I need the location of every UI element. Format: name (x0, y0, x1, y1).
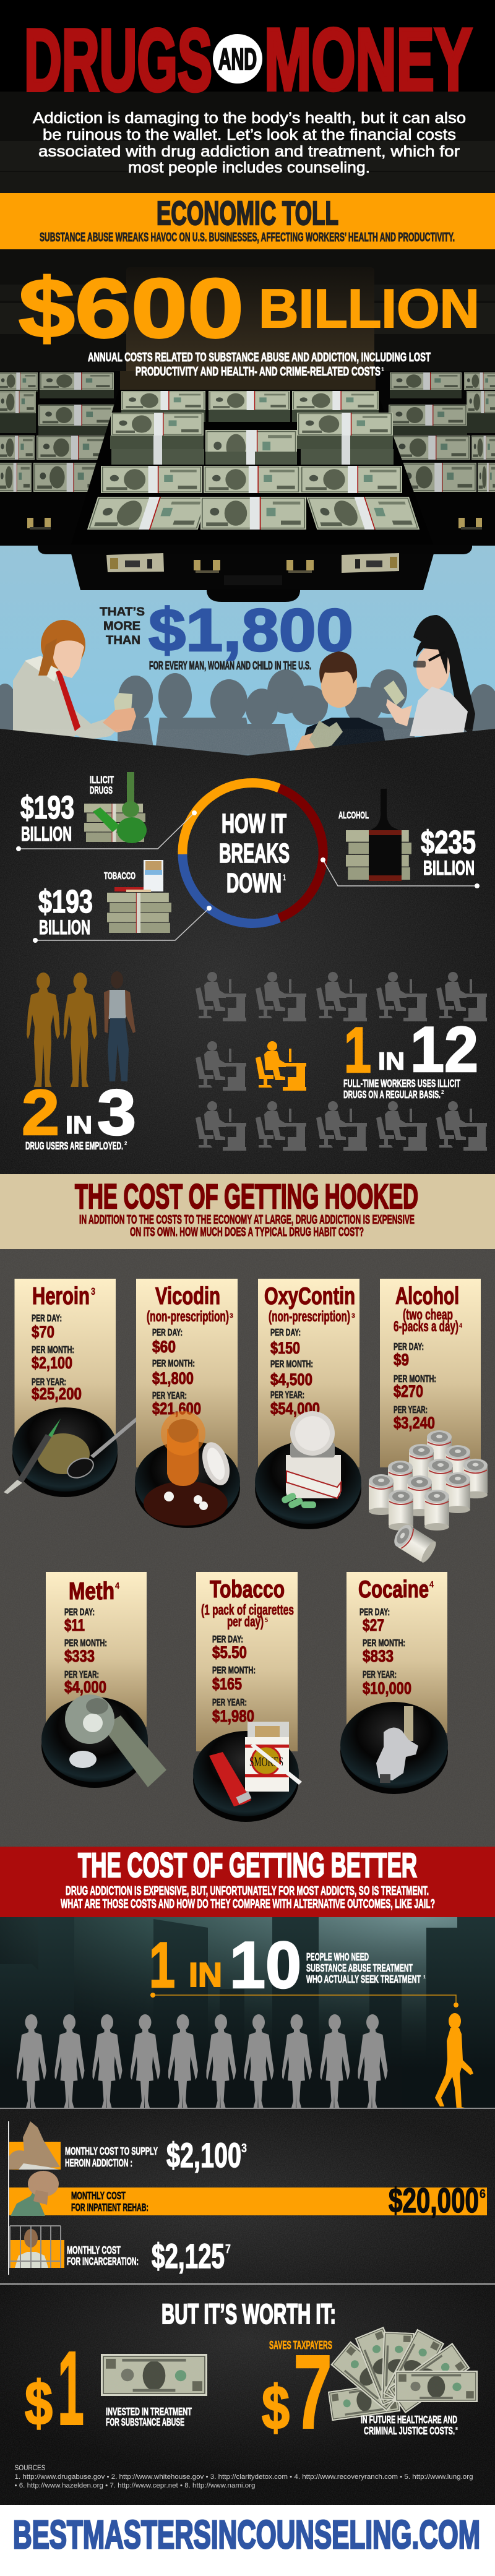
illustration: cocaine plate (340, 1702, 448, 1794)
card: heroin: $2,100 (32, 1354, 72, 1372)
card: vicodin: $21,600 (152, 1399, 201, 1418)
panel: money stacks and briefcase (0, 371, 495, 602)
bar: incarceration (9, 2226, 231, 2275)
intro text: most people includes counseling. (128, 159, 370, 176)
subheading (61, 1884, 435, 1911)
icon: fan of dollar bills (328, 2327, 478, 2421)
panel: sky background (0, 545, 495, 758)
icon: money stack (84, 804, 145, 842)
panel: city skyline (0, 1917, 495, 2109)
card: tobacco: $1,980 (212, 1707, 254, 1725)
illustration: meth pipe plate (41, 1694, 166, 1788)
stat: 1 in 10 seek treatment: SUBSTANCE ABUSE TREATMENT (306, 1962, 413, 1974)
icon: arm with syringe (9, 2121, 60, 2170)
card: alcohol: 4 (459, 1323, 462, 1329)
card: heroin: PER MONTH: (32, 1345, 74, 1355)
sources: • 6. http://www.hazelden.org • 7. http://www.cepr.net • 8. http://www.nami.org (15, 2482, 255, 2489)
stat: 1 in 12 workers: 1 (344, 1015, 371, 1086)
icon: man behind bars (10, 2226, 61, 2268)
heading: economic toll: ECONOMIC TOLL (157, 195, 338, 232)
bar: inpatient rehab: MONTHLY COST (71, 2189, 126, 2202)
badge: AND: AND (218, 43, 257, 76)
chart: desk worker pictogram (196, 972, 487, 1151)
stat: 2 in 3 employed: 3 (97, 1077, 136, 1149)
stat: $1 invested: $ (25, 2369, 53, 2438)
panel: monthly cost comparison (0, 2109, 495, 2284)
stat: 1 in 10 seek treatment: 1 (423, 1975, 426, 1980)
bar: inpatient rehab: 6 (480, 2187, 486, 2201)
stat: illicit drugs: BILLION (21, 823, 72, 845)
card: meth: Meth (69, 1578, 114, 1605)
card: vicodin: PER YEAR: (152, 1391, 187, 1401)
heading: how it breaks down (219, 809, 290, 898)
icon: money stack (346, 830, 411, 880)
card: meth: $4,000 (64, 1678, 106, 1696)
stat: 1 in 12 workers: 12 (410, 1014, 478, 1086)
card: tobacco: PER DAY: (212, 1634, 243, 1645)
clasps (194, 560, 314, 573)
card: tobacco: $5.50 (212, 1643, 247, 1662)
callout lines (19, 813, 477, 940)
intro text: be ruinous to the wallet. Let’s look at the financial costs (43, 126, 456, 144)
lid lining (120, 371, 376, 391)
stat: 1 in 12 workers: IN (378, 1048, 405, 1075)
card: meth: $333 (64, 1647, 95, 1665)
stat: 2 in 3 employed: IN (66, 1112, 92, 1139)
card: oxycontin: $150 (270, 1339, 300, 1357)
back money stacks (0, 372, 495, 492)
card: vicodin: (non-prescription) (147, 1308, 229, 1325)
heading: how it breaks down: BREAKS (219, 838, 290, 869)
card: heroin: Heroin (32, 1283, 90, 1310)
card: tobacco: per day) (227, 1613, 264, 1629)
stat: $7 saved: $ (262, 2373, 290, 2442)
card: oxycontin: $54,000 (270, 1399, 320, 1418)
card: meth: PER MONTH: (64, 1638, 107, 1649)
illustration: woman with glasses counting money (384, 615, 475, 736)
bar: incarceration: 7 (225, 2243, 231, 2256)
card: tobacco: PER YEAR: (212, 1698, 247, 1708)
bar: heroin supply: 3 (241, 2142, 247, 2155)
card: oxycontin: PER YEAR: (270, 1390, 304, 1401)
icon: cigarette pack and lighter (114, 860, 163, 892)
badge: AND (213, 34, 262, 84)
stat: tobacco: BILLION (39, 916, 90, 938)
card: oxycontin: (non-prescription) (269, 1308, 350, 1325)
stat: tobacco: TOBACCO (104, 871, 136, 882)
caption: for every man, woman and child: FOR EVERY MAN, WOMAN AND CHILD IN THE U.S. (149, 659, 311, 672)
intro text: Addiction is damaging to the body’s health, but it can also (33, 109, 466, 127)
card: heroin: $70 (32, 1323, 54, 1341)
panel: footer band (0, 2505, 495, 2576)
sources: 1. http://www.drugabuse.gov • 2. http://www.whitehouse.gov • 3. http://claritydetox.com • 4. http://www.recoveryranch.com • 5. http://www.lung.org (15, 2473, 473, 2481)
stat: 2 in 3 employed (22, 971, 136, 1152)
stat: alcohol (338, 789, 476, 881)
heading: how it breaks down: DOWN (226, 868, 282, 898)
card: cocaine: PER MONTH: (363, 1638, 405, 1649)
money in hand (103, 693, 136, 732)
stat: 1 in 10 seek treatment: PEOPLE WHO NEED (306, 1951, 369, 1963)
card: vicodin: 3 (230, 1313, 233, 1320)
card: heroin: $25,200 (32, 1385, 82, 1403)
big figure: $600 billion: BILLION (259, 278, 480, 339)
heading: but it's worth it: BUT IT’S WORTH IT: (161, 2298, 336, 2330)
card: tobacco: (1 pack of cigarettes (201, 1602, 294, 1618)
big figure: $600 billion: $600 (19, 261, 244, 355)
icon: whiskey bottle (369, 789, 402, 881)
card: cocaine: PER DAY: (359, 1607, 390, 1618)
bar: heroin supply: HEROIN ADDICTION : (65, 2157, 132, 2169)
stat: illicit drugs: ILLICIT (90, 774, 114, 786)
black case edge with side clasps (0, 492, 495, 554)
stat: $1 invested: INVESTED IN TREATMENT (106, 2405, 192, 2418)
card: alcohol: PER MONTH: (394, 1374, 436, 1385)
case lower body (71, 553, 434, 602)
card: meth: PER DAY: (64, 1607, 95, 1618)
stat: tobacco: $193 (38, 884, 93, 920)
bar: heroin supply (9, 2121, 247, 2175)
title: Drugs and Money: DRUGS (24, 11, 212, 109)
card: heroin (4, 1279, 143, 1497)
money (309, 721, 343, 750)
card: alcohol: PER YEAR: (394, 1405, 428, 1415)
card: tobacco: 5 (265, 1617, 268, 1624)
stat: 1 in 10 seek treatment: 1 (149, 1930, 175, 2001)
intro text: associated with drug addiction and treatment, which for (38, 143, 460, 160)
card: alcohol: $270 (394, 1382, 423, 1401)
icon: one dollar bill (101, 2354, 207, 2396)
card: heroin: 3 (91, 1286, 95, 1297)
bar: inpatient rehab: FOR INPATIENT REHAB: (71, 2201, 148, 2213)
combination locks (106, 553, 399, 573)
card: oxycontin: PER MONTH: (270, 1359, 313, 1370)
subheading (79, 1213, 415, 1239)
illustration: cigarettes and lighter plate (193, 1722, 302, 1822)
card: tobacco: PER MONTH: (212, 1665, 256, 1676)
icon: bald man (11, 2171, 59, 2216)
stat: tobacco (38, 860, 171, 938)
illustration: man counting money (13, 620, 136, 741)
card: vicodin: PER MONTH: (152, 1359, 195, 1369)
stat: $7 saved: SAVES TAXPAYERS (269, 2339, 332, 2351)
connector: one in ten line (150, 1993, 458, 2007)
text: that's more than: THAN (106, 634, 140, 647)
panel: grey cloth background (0, 1249, 495, 1847)
panel: worth it section (0, 2283, 495, 2505)
stat: 2 in 3 employed: 2 (124, 1141, 127, 1146)
illustration: crowd silhouettes (0, 669, 495, 755)
heading: how it breaks down: 1 (283, 872, 286, 882)
card: vicodin: $60 (152, 1337, 176, 1356)
illustration: boy counting money (291, 651, 389, 758)
description: annual costs (88, 351, 431, 379)
card: oxycontin: OxyContin (264, 1283, 355, 1310)
stat: $1 invested: FOR SUBSTANCE ABUSE (106, 2416, 184, 2428)
stat: 1 in 10 seek treatment: IN (189, 1956, 222, 1994)
stat: $7 saved (262, 2327, 478, 2451)
illustration: heroin plate (4, 1407, 143, 1497)
money (384, 680, 405, 705)
panel: cost of getting better banner (0, 1845, 495, 1917)
illustration: cigarettes and lighter plate: SMOKES (249, 1754, 283, 1769)
front money stacks (87, 391, 420, 530)
card: cocaine: $833 (363, 1647, 394, 1665)
stat: 1 in 10 seek treatment (149, 1928, 426, 2002)
card: alcohol: $3,240 (394, 1414, 435, 1432)
case interior (71, 390, 433, 544)
chart: how it breaks down ring (183, 783, 323, 924)
card: alcohol: PER DAY: (394, 1342, 424, 1352)
card: meth: $11 (64, 1616, 85, 1634)
text: that's more than: THAT’S (100, 606, 145, 619)
panel: header background (0, 0, 495, 371)
card: alcohol: 6-packs a day) (394, 1318, 458, 1335)
bar: inpatient rehab (9, 2171, 487, 2220)
card: vicodin: PER DAY: (152, 1328, 183, 1338)
description: annual costs: 1 (381, 366, 384, 372)
card: tobacco: Tobacco (210, 1576, 285, 1603)
bar: incarceration: MONTHLY COST (67, 2244, 121, 2256)
stat: alcohol: ALCOHOL (338, 810, 369, 821)
illustration: vicodin plate (135, 1411, 240, 1528)
card: cocaine (340, 1572, 448, 1794)
card: oxycontin: PER DAY: (270, 1328, 301, 1338)
card: heroin: PER YEAR: (32, 1377, 66, 1388)
bar: heroin supply: MONTHLY COST TO SUPPLY (65, 2145, 158, 2157)
text: that's more than (100, 606, 145, 647)
icon: person with tank top (104, 971, 136, 1081)
card: alcohol: $9 (394, 1350, 409, 1369)
panel: cost of getting hooked header (0, 1174, 495, 1249)
intro text (33, 109, 466, 176)
card: vicodin (135, 1279, 240, 1528)
sources (15, 2463, 473, 2489)
big figure: $600 billion (19, 261, 480, 355)
card: vicodin: $1,800 (152, 1369, 194, 1388)
card: meth: PER YEAR: (64, 1670, 99, 1680)
card: oxycontin: 3 (351, 1313, 355, 1320)
card: cocaine: 4 (429, 1579, 434, 1590)
stat: $1 invested: 1 (58, 2330, 84, 2447)
bar: heroin supply: $2,100 (166, 2136, 241, 2175)
sources: SOURCES (15, 2463, 46, 2472)
panel: economic toll banner (0, 193, 495, 249)
illustration: oxycontin plate (255, 1411, 361, 1529)
stat: 1 in 10 seek treatment: 10 (230, 1928, 301, 2002)
icon: orange walking person (435, 2013, 473, 2110)
stat: 2 in 3 employed: DRUG USERS ARE EMPLOYED. (25, 1140, 123, 1152)
card: cocaine: $10,000 (363, 1679, 411, 1698)
stat: 1 in 12 workers (343, 1014, 478, 1101)
stat: 1 in 10 seek treatment: WHO ACTUALLY SEEK TREATMENT (306, 1973, 421, 1985)
card: oxycontin: $4,500 (270, 1370, 312, 1389)
stat: illicit drugs: $193 (20, 790, 74, 826)
card: cocaine: PER YEAR: (363, 1670, 397, 1680)
bar: incarceration: $2,125 (152, 2236, 225, 2275)
chart: ten person pictogram (17, 2014, 387, 2108)
description: annual costs: PRODUCTIVITY AND HEALTH- AND CRIME-RELATED COSTS (136, 365, 381, 379)
card: heroin: PER DAY: (32, 1313, 62, 1324)
icon: gold figures (27, 972, 97, 1088)
card: cocaine: $27 (363, 1616, 384, 1634)
icon: money stack (107, 893, 171, 933)
icon: bong (93, 772, 147, 843)
card: tobacco (193, 1572, 302, 1822)
card: alcohol: Alcohol (395, 1283, 459, 1310)
card: meth: 4 (115, 1581, 120, 1591)
illustration: beer cans (369, 1430, 488, 1565)
stat: $1 invested (25, 2330, 207, 2447)
stat: $7 saved: 7 (293, 2333, 332, 2451)
card: alcohol (369, 1279, 488, 1565)
stat: illicit drugs: DRUGS (90, 784, 113, 796)
card: vicodin: Vicodin (155, 1283, 220, 1310)
text: that's more than: MORE (103, 620, 140, 633)
big figure: $1,800: $1,800 (148, 596, 353, 664)
stat: alcohol: $235 (421, 825, 476, 861)
card: oxycontin (255, 1279, 361, 1529)
card: tobacco: $165 (212, 1675, 242, 1693)
stat: 2 in 3 employed: 2 (22, 1077, 59, 1149)
stat: illicit drugs (20, 772, 147, 845)
card: meth (41, 1572, 166, 1788)
ground line (0, 2108, 495, 2109)
stat: $7 saved: 8 (455, 2427, 458, 2431)
bar: incarceration: FOR INCARCERATION: (67, 2255, 139, 2267)
heading: how it breaks down: HOW IT (222, 809, 286, 839)
panel: chalkboard breakdown (0, 729, 495, 1174)
card: cocaine: Cocaine (358, 1576, 429, 1603)
stat: 1 in 12 workers: 2 (441, 1089, 444, 1095)
card: alcohol: (two cheap (403, 1307, 453, 1323)
